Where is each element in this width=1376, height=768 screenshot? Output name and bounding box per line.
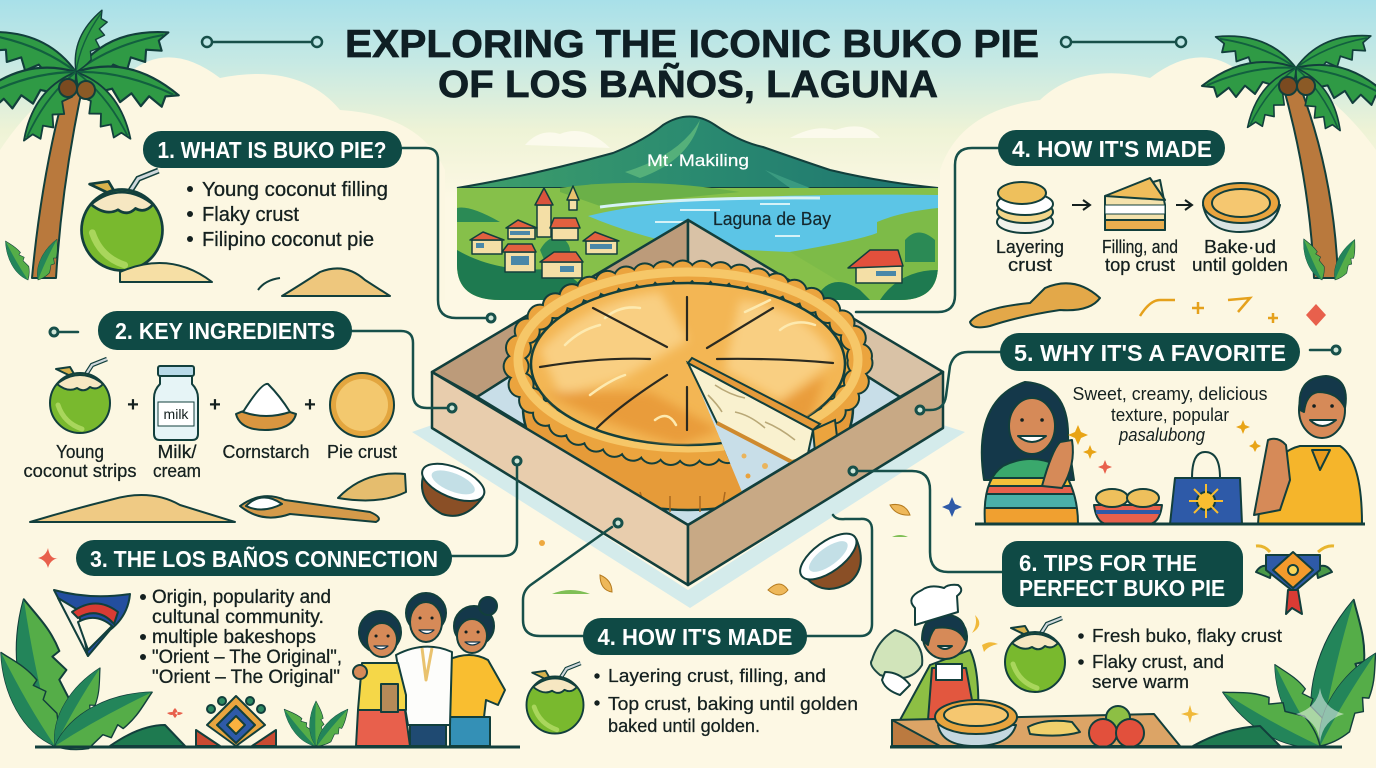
favorite text: pasalubong (1118, 424, 1206, 445)
icon: layered crust stack (997, 182, 1053, 233)
pie slice cut: coconut filling (688, 363, 813, 462)
heading pill 2: 2. KEY INGREDIENTS (115, 318, 335, 344)
decorative flower (167, 708, 183, 718)
sand patches (120, 263, 390, 296)
village houses (470, 186, 903, 283)
step labels: Bake·ud (1204, 237, 1276, 257)
crumbs and coconut half (539, 504, 910, 602)
icon: cornstarch (236, 384, 296, 430)
bullet list 1: Filipino coconut pie (202, 229, 374, 251)
ingredient labels: cream (153, 461, 201, 481)
bullet list 6 (1078, 626, 1282, 692)
bullet list 6: Flaky crust, and (1092, 652, 1224, 672)
bullet list 3: multiple bakeshops (152, 627, 316, 648)
right palm tree (1200, 30, 1376, 284)
woven ornament (196, 696, 276, 746)
icon: milk bottle (154, 366, 198, 440)
ground line bottom right (890, 746, 1342, 748)
icon: pie crust (330, 373, 394, 437)
heading pill 3: 3. THE LOS BAÑOS CONNECTION (90, 545, 438, 572)
sparkle (38, 548, 58, 568)
ingredient labels: Pie crust (327, 442, 397, 462)
icon: milk bottle: milk (164, 406, 189, 422)
table with pie and tomatoes (892, 700, 1180, 747)
bullet list 1: Flaky crust (202, 204, 299, 226)
bullet list 3: cultunal community. (152, 607, 324, 628)
landscape labels: Laguna de Bay (713, 209, 831, 229)
title ornaments (202, 37, 1186, 47)
step labels: Filling, and (1102, 237, 1178, 257)
heading pill 1 (143, 131, 402, 168)
panel 3: the los banos connection (0, 540, 520, 763)
plus signs (127, 394, 316, 416)
landscape labels: Mt. Makiling (647, 151, 749, 170)
panel: bottom how it's made (526, 504, 910, 736)
heading pill 4 (998, 130, 1225, 166)
bullet list 3: "Orient – The Original" (152, 667, 340, 688)
ingredient labels: Cornstarch (222, 442, 310, 462)
landscape: Mt. Makiling and Laguna de Bay (457, 116, 938, 300)
three smiling people (353, 593, 505, 746)
bullet list 3: Origin, popularity and (152, 587, 331, 608)
heading pill 4b (583, 618, 807, 655)
chef pouring (871, 585, 978, 720)
pie box (412, 220, 965, 608)
spoon with dough (970, 283, 1100, 327)
panel 5: why it's a favorite (942, 333, 1365, 530)
favorite text: Sweet, creamy, delicious (1072, 383, 1268, 404)
smiling man (1254, 376, 1362, 524)
heading pill 5: 5. WHY IT'S A FAVORITE (1014, 340, 1286, 366)
icon: Philippine flag pennant (54, 590, 130, 656)
step labels (996, 237, 1288, 275)
box shadow (412, 425, 965, 608)
favorite text (1072, 383, 1268, 445)
bullet list 3: "Orient – The Original", (152, 647, 342, 668)
parol lantern ornament (1256, 546, 1334, 614)
plus signs: + (127, 394, 139, 416)
foliage right (1193, 595, 1376, 760)
bullet list 1 (187, 179, 388, 251)
panel 6: tips (871, 541, 1376, 760)
bullet list 4b (594, 666, 858, 736)
icon: filling slice (1105, 178, 1165, 230)
bullet list 4b: Layering crust, filling, and (608, 666, 826, 686)
bullet list 1: Young coconut filling (202, 179, 388, 201)
heading pill 6 (1002, 541, 1243, 607)
bullet list 6: serve warm (1092, 672, 1189, 692)
bullet list 4b: baked until golden. (608, 716, 760, 736)
heading pill 1: 1. WHAT IS BUKO PIE? (158, 137, 386, 163)
plus signs: + (209, 394, 221, 416)
box front walls (432, 372, 943, 585)
connector end dots (50, 314, 1340, 527)
heading pill 3 (76, 540, 452, 576)
ingredient labels: Milk/ (158, 442, 196, 462)
plus signs: + (304, 394, 316, 416)
icon: young coconut (1005, 618, 1065, 692)
panel 4: how it's made (top) (970, 130, 1326, 327)
foliage (0, 594, 354, 763)
buko pie with missing slice (516, 272, 860, 512)
connectors (60, 148, 1330, 636)
decorative accents (1140, 298, 1326, 326)
heading pill 6: PERFECT BUKO PIE (1019, 575, 1225, 601)
left palm tree (0, 8, 182, 283)
heading pill 5 (1000, 333, 1300, 371)
ground line left (35, 746, 520, 748)
icon: coconut strips (50, 359, 110, 433)
decorative crescents (972, 615, 1199, 723)
ground line right (975, 522, 1365, 526)
ingredient labels: Young (56, 442, 104, 462)
arrow (1072, 200, 1090, 210)
panel 2: key ingredients (24, 311, 492, 528)
bowl of pies (1094, 489, 1162, 524)
icon: young coconut (82, 171, 162, 270)
arrow (1176, 200, 1192, 210)
ingredient labels: coconut strips (24, 461, 136, 481)
title: OF LOS BAÑOS, LAGUNA (438, 62, 938, 106)
favorite text: texture, popular (1111, 404, 1229, 425)
heading pill 6: 6. TIPS FOR THE (1019, 550, 1197, 576)
icon: coconut (526, 663, 584, 734)
panel 1: what is buko pie (82, 131, 402, 296)
box back walls and floor (432, 220, 943, 525)
step labels: until golden (1192, 255, 1288, 275)
smiling woman (980, 382, 1080, 530)
heading pill 4: 4. HOW IT'S MADE (1012, 136, 1212, 162)
bullet list 4b: Top crust, baking until golden (608, 694, 858, 714)
step labels: Layering (996, 237, 1064, 257)
landscape labels (647, 151, 831, 229)
bullet list 6: Fresh buko, flaky crust (1092, 626, 1282, 646)
heading pill 2 (98, 311, 352, 350)
pasalubong bag (1170, 452, 1242, 524)
corner sparkle (1296, 688, 1344, 742)
heading pill 4b: 4. HOW IT'S MADE (598, 624, 792, 650)
sparkles (942, 420, 1261, 517)
bullet list 3 (140, 587, 342, 688)
title: EXPLORING THE ICONIC BUKO PIE (345, 23, 1039, 66)
title (345, 23, 1039, 106)
sand, spoon, coconut row (30, 450, 492, 528)
ingredient labels (24, 442, 397, 481)
icon: baked pie (1203, 183, 1280, 232)
step labels: top crust (1105, 255, 1175, 275)
step labels: crust (1008, 255, 1052, 275)
